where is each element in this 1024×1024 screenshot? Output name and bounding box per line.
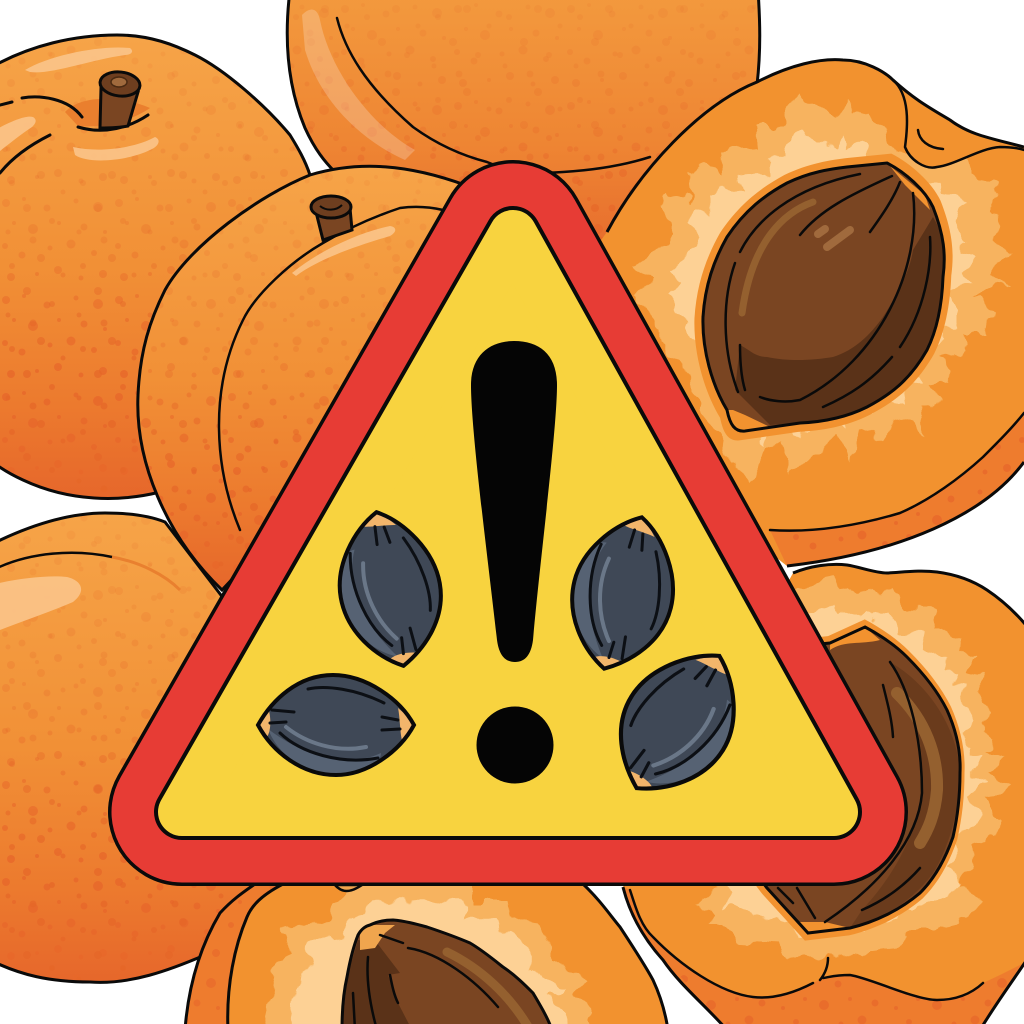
exclamation mark [471, 341, 557, 784]
icon: stem [311, 196, 352, 240]
triangle: yellow field [182, 234, 834, 812]
pit end dimple [335, 885, 362, 891]
icon: seed lower right [592, 628, 764, 816]
fold at stem end [893, 80, 1024, 168]
apricot: half bottom center [185, 879, 668, 1024]
icon: seed upper left [327, 504, 453, 674]
icon: seed upper right [556, 505, 690, 681]
apricot: half top right [590, 60, 1024, 566]
skin band [623, 887, 1024, 1024]
apricot: whole top center [286, 0, 762, 240]
pit [342, 920, 552, 1024]
icon: seed lower left [258, 675, 414, 775]
triangle: black outline [182, 234, 834, 812]
apricot: whole center left [138, 166, 465, 590]
triangle: red border [182, 234, 834, 812]
apricot: whole top left [0, 35, 310, 498]
icon: stem [99, 70, 141, 128]
apricot: whole bottom left [0, 513, 260, 982]
skin band [185, 884, 283, 1024]
apricot: half bottom right [623, 564, 1024, 1024]
burst: pale flesh rays [698, 576, 1008, 961]
pit [700, 627, 960, 933]
warning triangle [182, 234, 834, 816]
skin band [770, 398, 1024, 566]
burst: pale flesh rays [264, 879, 591, 1024]
triangle: inner outline [182, 234, 834, 812]
burst: pale flesh rays [634, 94, 1011, 484]
pit [703, 163, 944, 431]
